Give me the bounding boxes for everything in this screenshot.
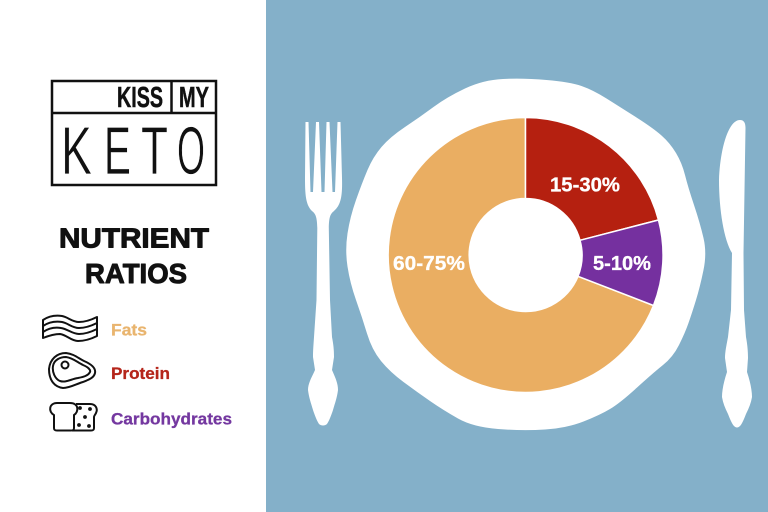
icon: fork	[305, 122, 342, 426]
data labels: 15-30%	[550, 174, 620, 196]
heading: nutrient ratios	[59, 222, 209, 289]
panel: blue table background	[266, 0, 768, 512]
donut chart	[388, 117, 663, 392]
data labels: 5-10%	[593, 252, 651, 275]
heading: nutrient ratios: NUTRIENT	[59, 222, 209, 254]
segment: fats	[388, 118, 654, 392]
label: fats: Fats	[111, 322, 147, 340]
logo: Kiss My Keto	[52, 81, 216, 189]
legend	[43, 316, 232, 430]
icon: knife	[719, 120, 752, 428]
logo: Kiss My Keto: E	[104, 113, 131, 189]
heading: nutrient ratios: RATIOS	[85, 258, 187, 289]
data labels: 60-75%	[393, 252, 465, 275]
icon: bread	[50, 403, 97, 430]
logo: Kiss My Keto: MY	[179, 82, 209, 114]
data labels	[393, 174, 651, 275]
label: carbohydrates: Carbohydrates	[111, 410, 232, 428]
logo: Kiss My Keto: KISS	[117, 82, 163, 114]
label: protein: Protein	[111, 365, 170, 383]
logo: Kiss My Keto: T	[141, 113, 168, 189]
segment: carbohydrates	[578, 220, 663, 306]
logo: Kiss My Keto: K	[61, 113, 92, 189]
logo: Kiss My Keto: O	[177, 113, 205, 189]
segment: protein	[526, 117, 658, 240]
icon: bacon	[43, 316, 97, 341]
plate	[346, 79, 705, 430]
icon: steak	[49, 353, 95, 388]
